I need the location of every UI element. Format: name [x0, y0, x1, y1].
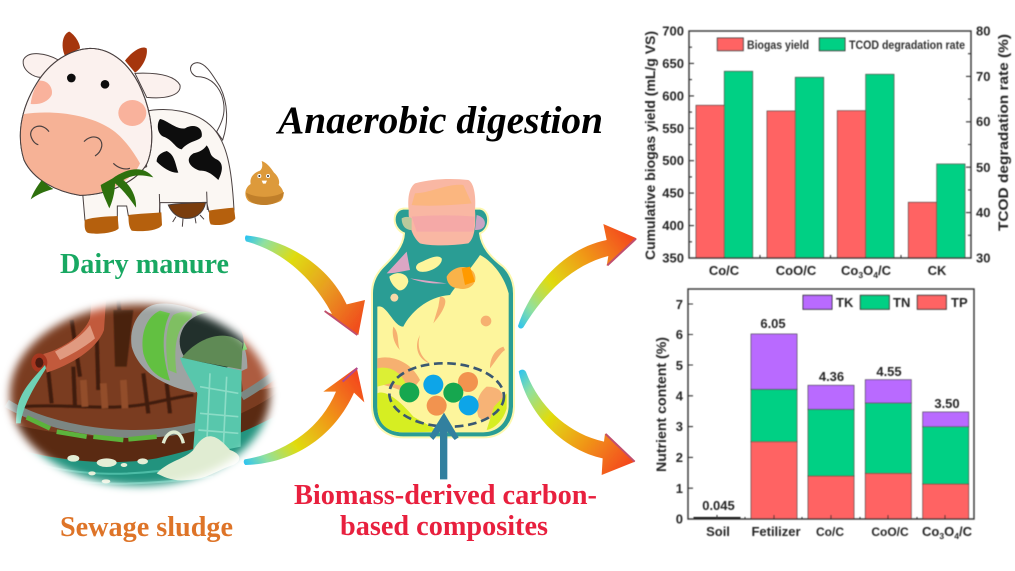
right axis labels: 60 [976, 114, 990, 129]
label: dairy manure: Dairy manure [60, 249, 229, 280]
right axis labels: 30 [976, 250, 990, 266]
legend: Biogas yield [747, 40, 809, 52]
y axis title: Nutrient content (%) [653, 337, 669, 472]
right axis labels: 70 [976, 69, 990, 84]
total labels: 3.50 [934, 396, 960, 411]
biogas bars [696, 105, 937, 258]
arrow: dairy manure to bottle [245, 235, 365, 335]
right axis labels: 80 [976, 24, 990, 38]
sludge band [14, 396, 272, 462]
label: biomass-derived carbon-based composites: Biomass-derived carbon- [294, 480, 597, 511]
TN segments [751, 389, 969, 484]
cow hooves [85, 208, 235, 234]
category labels [706, 524, 973, 541]
sludge foam [157, 436, 239, 480]
bottle contents [377, 255, 509, 432]
illustration: sewage sludge [3, 297, 277, 493]
legend: TCOD degradation rate [849, 40, 965, 52]
arrow: sewage sludge to bottle [244, 367, 364, 465]
right axis labels [976, 24, 990, 266]
cow head [20, 48, 152, 195]
cow grass [31, 169, 153, 208]
cow eyes [67, 74, 76, 82]
sludge waterfall [180, 357, 242, 457]
left axis labels: 600 [662, 88, 684, 104]
big pipe [131, 304, 247, 393]
arrow: composites into bottle [429, 413, 459, 479]
category labels: /C [959, 524, 973, 539]
legend [717, 38, 965, 52]
catalyst dashed ellipse [388, 361, 505, 429]
category labels: CoO/C [871, 525, 909, 539]
category labels: /C [878, 263, 892, 278]
y axis labels: 7 [676, 297, 683, 312]
category labels: Co/C [709, 263, 740, 278]
total labels: 4.55 [876, 364, 902, 379]
category labels: Co [922, 524, 939, 539]
title: Anaerobic digestion [275, 99, 603, 142]
arrow: bottle to nutrient chart [519, 370, 635, 475]
cow nostrils [31, 126, 130, 169]
left axis labels: 500 [662, 153, 684, 168]
left axis labels: 350 [662, 250, 684, 266]
TCOD bars [724, 71, 965, 258]
left axis labels: 650 [662, 56, 684, 71]
sludge water pool [33, 418, 272, 491]
category labels: Fetilizer [751, 524, 801, 539]
cow muzzle [21, 112, 140, 195]
category labels: 3 [939, 531, 944, 541]
cow horns [63, 32, 80, 56]
small pipe [43, 300, 106, 373]
cow body [83, 110, 234, 221]
arrows [244, 224, 637, 475]
legend [803, 295, 968, 310]
TP segments [751, 442, 969, 519]
cow tail [190, 63, 227, 140]
legend: TN [893, 295, 910, 310]
left axis labels: 400 [662, 218, 684, 233]
y axis labels [676, 297, 684, 526]
category labels: 4 [954, 531, 959, 541]
category labels: CK [928, 263, 947, 278]
left axis labels: 700 [662, 24, 684, 38]
chart: nutrient content [653, 289, 974, 541]
y axis labels: 2 [676, 450, 683, 465]
soil bar [694, 518, 740, 519]
right axis labels: 40 [976, 205, 990, 220]
y axis labels: 3 [676, 419, 683, 434]
axis titles: Cumulative biogas yield (mL/g VS) [642, 31, 658, 260]
category labels: Co/C [816, 525, 844, 539]
total labels: 0.045 [702, 498, 735, 513]
illustration: dairy cow [20, 32, 235, 234]
category labels: Co [841, 263, 858, 278]
category labels: O [944, 524, 954, 539]
category labels [709, 263, 947, 280]
y axis labels: 5 [676, 358, 683, 373]
total labels: 6.05 [760, 316, 786, 331]
total labels: 4.36 [819, 369, 844, 384]
category labels: O [863, 263, 873, 278]
catalyst particles [399, 382, 419, 402]
category labels: 4 [873, 270, 878, 280]
chart: biogas yield and TCOD degradation: TCOD degradation rate (%) [995, 34, 1011, 231]
total labels [702, 316, 960, 513]
sludge wall [3, 297, 277, 462]
category labels: CoO/C [776, 263, 817, 278]
y axis labels: 4 [676, 388, 684, 404]
left axis labels [662, 24, 684, 266]
bottle bubbles [389, 257, 442, 290]
label: biomass-derived carbon-based composites: based composites [340, 511, 548, 542]
y axis labels: 0 [676, 512, 683, 526]
legend: TK [836, 295, 854, 310]
category labels: 3 [858, 270, 863, 280]
y axis labels: 6 [676, 327, 683, 342]
y axis labels: 1 [676, 481, 683, 496]
arrow: bottle to biogas chart [518, 224, 637, 328]
label: biomass-derived carbon-based composites [294, 480, 597, 542]
cow ears [23, 54, 58, 77]
cow spots [157, 119, 222, 180]
left axis labels: 550 [662, 121, 684, 136]
left axis labels: 450 [662, 186, 684, 200]
label: sewage sludge: Sewage sludge [60, 512, 233, 543]
chart: biogas yield and TCOD degradation [642, 24, 1011, 280]
right axis labels: 50 [976, 160, 990, 175]
cow udder [168, 202, 206, 218]
icon: manure [245, 161, 284, 205]
category labels: Soil [706, 524, 730, 539]
TK segments [751, 334, 969, 427]
bottle glass [372, 209, 514, 437]
bottle cork [408, 179, 475, 245]
legend: TP [951, 295, 968, 310]
cow cheeks [118, 100, 146, 126]
illustration: digestion bottle [372, 179, 514, 479]
